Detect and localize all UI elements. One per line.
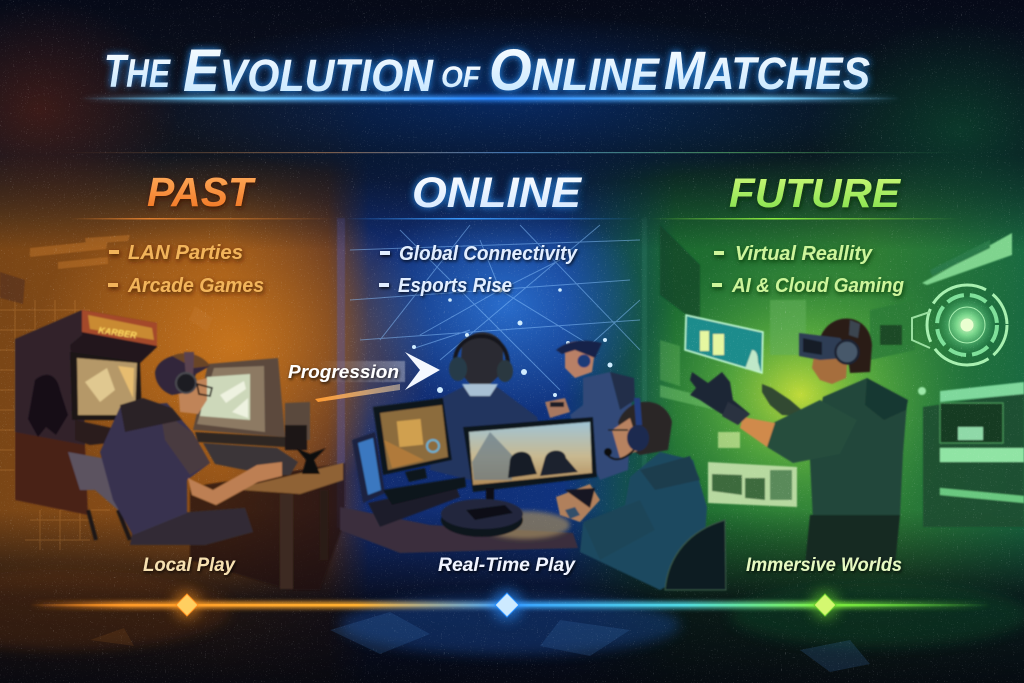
keyboard [203, 443, 298, 475]
bullets: future: AI & Cloud Gaming [731, 275, 904, 297]
back monitor [352, 432, 385, 503]
heading: future: FUTURE [729, 170, 902, 216]
divider: future [650, 218, 960, 220]
arrow: progression: Progression [288, 362, 399, 382]
bullets: future: Virtual Reallity [735, 243, 873, 265]
bullets: past: Arcade Games [127, 275, 264, 297]
caption: immersive worlds: Immersive Worlds [746, 555, 902, 576]
heading: past: PAST [147, 169, 256, 215]
CRT computer [193, 358, 310, 450]
bullets: online: Esports Rise [398, 275, 512, 297]
bullets: online [379, 243, 578, 297]
backdrop: network nodes [412, 288, 612, 397]
bullets: online: Global Connectivity [399, 243, 578, 265]
top divider [60, 152, 960, 153]
backdrop: green HUD panels [660, 225, 1024, 527]
decorative shards bottom [90, 612, 870, 672]
head [799, 319, 872, 384]
divider: online [345, 218, 640, 220]
glove [690, 372, 750, 425]
bullets: past: LAN Parties [128, 242, 243, 264]
marker: online [492, 590, 522, 620]
title underline [80, 96, 900, 101]
arcade cabinet [15, 310, 157, 515]
gamer with controller [545, 341, 635, 480]
illustration: past gamer scene [15, 310, 345, 590]
joystick [296, 448, 326, 474]
monitor right [463, 417, 597, 506]
gamer front right [556, 398, 707, 590]
title: MATCHES [664, 41, 870, 101]
caption: real-time play: Real-Time Play [438, 555, 576, 576]
monitor and keyboard left [368, 398, 466, 527]
desk [190, 463, 345, 590]
icon: holographic screen [685, 315, 763, 373]
marker: future [811, 591, 839, 619]
bullets: past [108, 242, 264, 297]
title [104, 37, 870, 104]
forearm [740, 417, 775, 447]
icon: HUD target circle [912, 285, 1007, 365]
title: ONLINE [489, 38, 661, 103]
title: OF [441, 61, 481, 94]
icon: lower holo screen [708, 432, 797, 507]
timeline [30, 590, 990, 620]
back hand [762, 384, 804, 416]
console puck [441, 499, 523, 537]
gamer [68, 352, 282, 545]
chair [665, 520, 726, 590]
body [810, 378, 907, 520]
marker: past [173, 591, 201, 619]
desk [340, 507, 578, 553]
arcade cabinet: KARBER [98, 325, 138, 340]
illustration: online gamers scene [340, 332, 726, 590]
title: EVOLUTION [183, 37, 434, 104]
title: THE [104, 45, 171, 97]
bullets: future [712, 243, 904, 297]
divider: past [70, 218, 335, 220]
backdrop: floating panels past [0, 235, 213, 332]
arrow: progression [288, 352, 440, 402]
gamer standing with headset [430, 332, 540, 480]
backdrop: network lines [350, 225, 640, 390]
heading: online: ONLINE [412, 169, 582, 217]
illustration: future VR gamer [690, 319, 908, 565]
caption: local play: Local Play [143, 555, 236, 576]
backdrop: retro grid on past panel [0, 300, 110, 550]
